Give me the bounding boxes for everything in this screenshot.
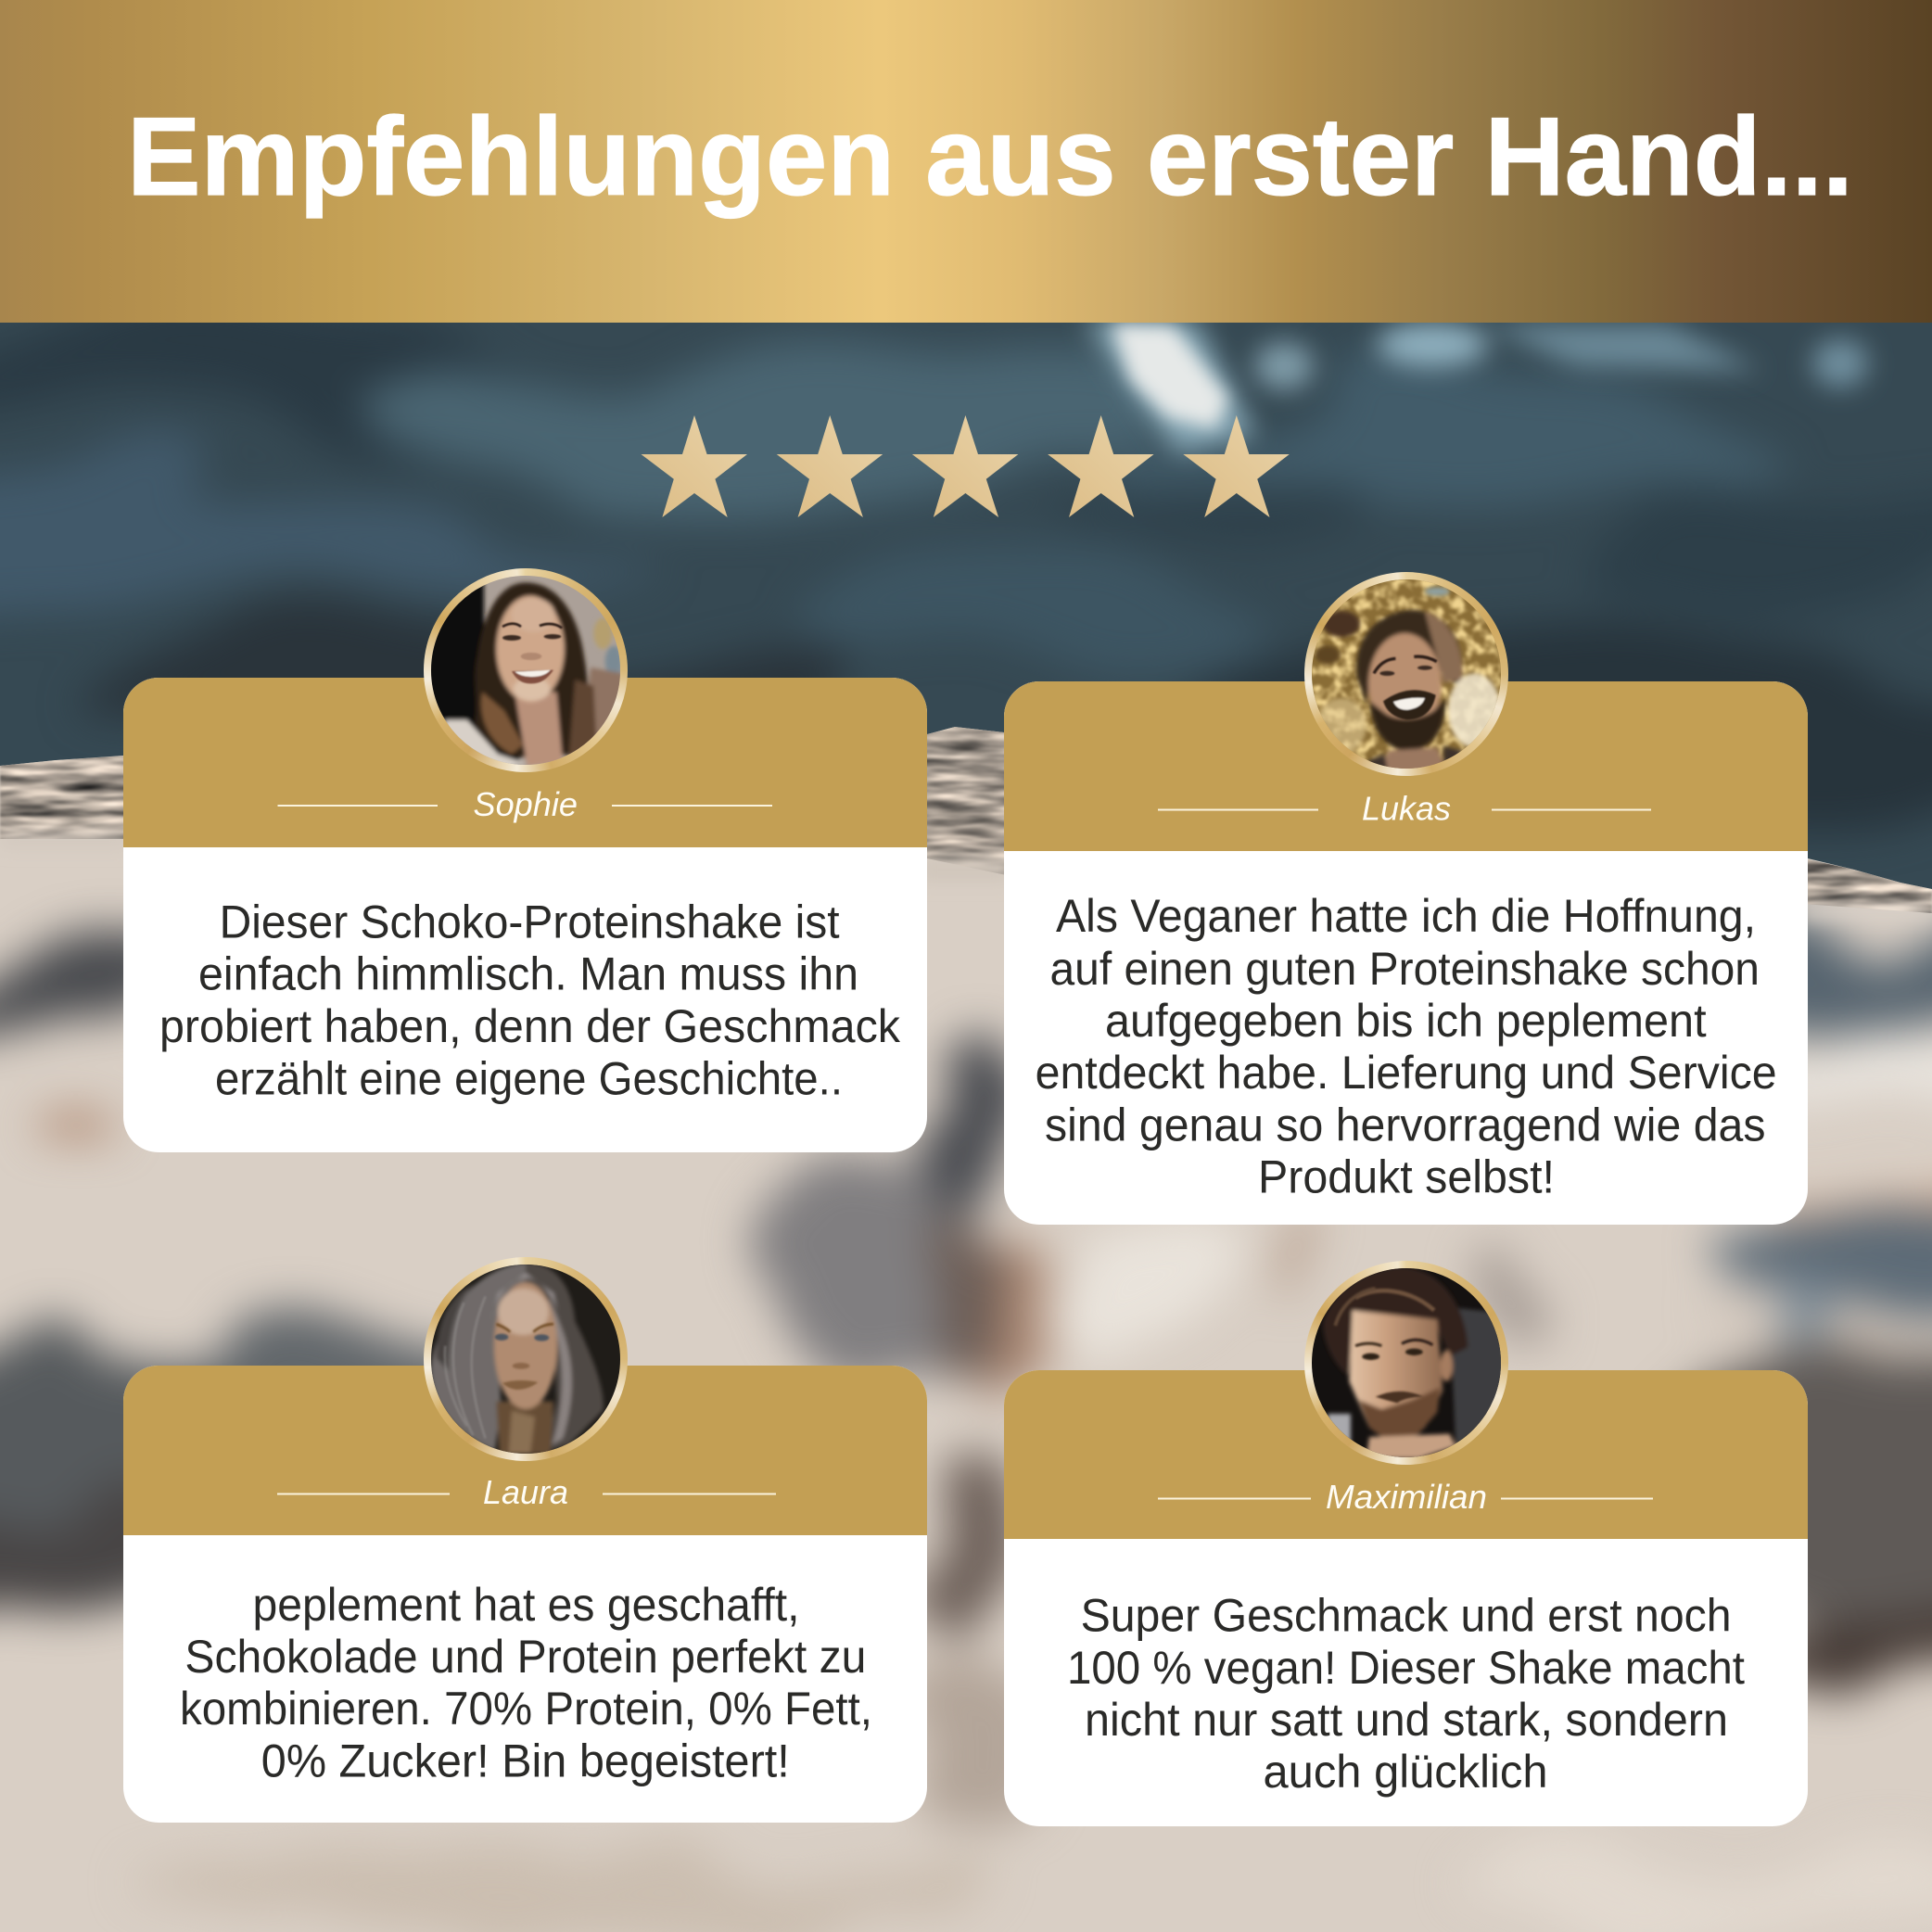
card panel with name and quote: probiert haben, denn der Geschmack <box>159 1000 901 1052</box>
five star rating <box>642 415 1290 517</box>
card panel with name and quote: Als Veganer hatte ich die Hoffnung, <box>1056 890 1756 942</box>
header banner <box>0 0 1932 323</box>
card panel with name and quote: Maximilian <box>1326 1478 1487 1516</box>
card panel with name and quote: Schokolade und Protein perfekt zu <box>184 1631 866 1683</box>
card panel with name and quote: Super Geschmack und erst noch <box>1081 1589 1732 1641</box>
portrait: Laura <box>424 1257 628 1461</box>
card panel with name and quote <box>1004 1370 1808 1826</box>
card panel with name and quote: 100 % vegan! Dieser Shake macht <box>1067 1642 1745 1694</box>
card panel with name and quote: einfach himmlisch. Man muss ihn <box>198 948 858 1000</box>
portrait: Maximilian <box>1304 1261 1508 1465</box>
testimonial card: Lukas <box>1004 572 1808 1225</box>
card panel with name and quote: peplement hat es geschafft, <box>252 1579 799 1631</box>
testimonial card: Laura <box>123 1257 927 1823</box>
card panel with name and quote: aufgegeben bis ich peplement <box>1105 995 1707 1047</box>
card panel with name and quote: nicht nur satt und stark, sondern <box>1085 1694 1728 1746</box>
title: Empfehlungen aus erster Hand... <box>127 95 1853 219</box>
testimonial card: Sophie <box>123 568 927 1152</box>
testimonial card: Maximilian <box>1004 1261 1808 1826</box>
card panel with name and quote: Dieser Schoko-Proteinshake ist <box>220 896 840 948</box>
card panel with name and quote: entdeckt habe. Lieferung und Service <box>1036 1047 1777 1099</box>
card panel with name and quote: 0% Zucker! Bin begeistert! <box>261 1735 790 1787</box>
card panel with name and quote: auch glücklich <box>1263 1746 1548 1798</box>
card panel with name and quote: Sophie <box>473 785 578 823</box>
card panel with name and quote: kombinieren. 70% Protein, 0% Fett, <box>180 1683 872 1735</box>
card panel with name and quote: Produkt selbst! <box>1258 1151 1555 1203</box>
card panel with name and quote <box>123 1366 927 1823</box>
card panel with name and quote: Laura <box>483 1473 568 1511</box>
card panel with name and quote: erzählt eine eigene Geschichte.. <box>215 1053 843 1105</box>
card panel with name and quote: auf einen guten Proteinshake schon <box>1049 943 1760 995</box>
card panel with name and quote: Lukas <box>1362 790 1451 827</box>
card panel with name and quote <box>123 678 927 1152</box>
card panel with name and quote <box>1004 681 1808 1225</box>
portrait: Lukas <box>1304 572 1508 776</box>
card panel with name and quote: sind genau so hervorragend wie das <box>1045 1099 1765 1150</box>
portrait: Sophie <box>424 568 628 772</box>
